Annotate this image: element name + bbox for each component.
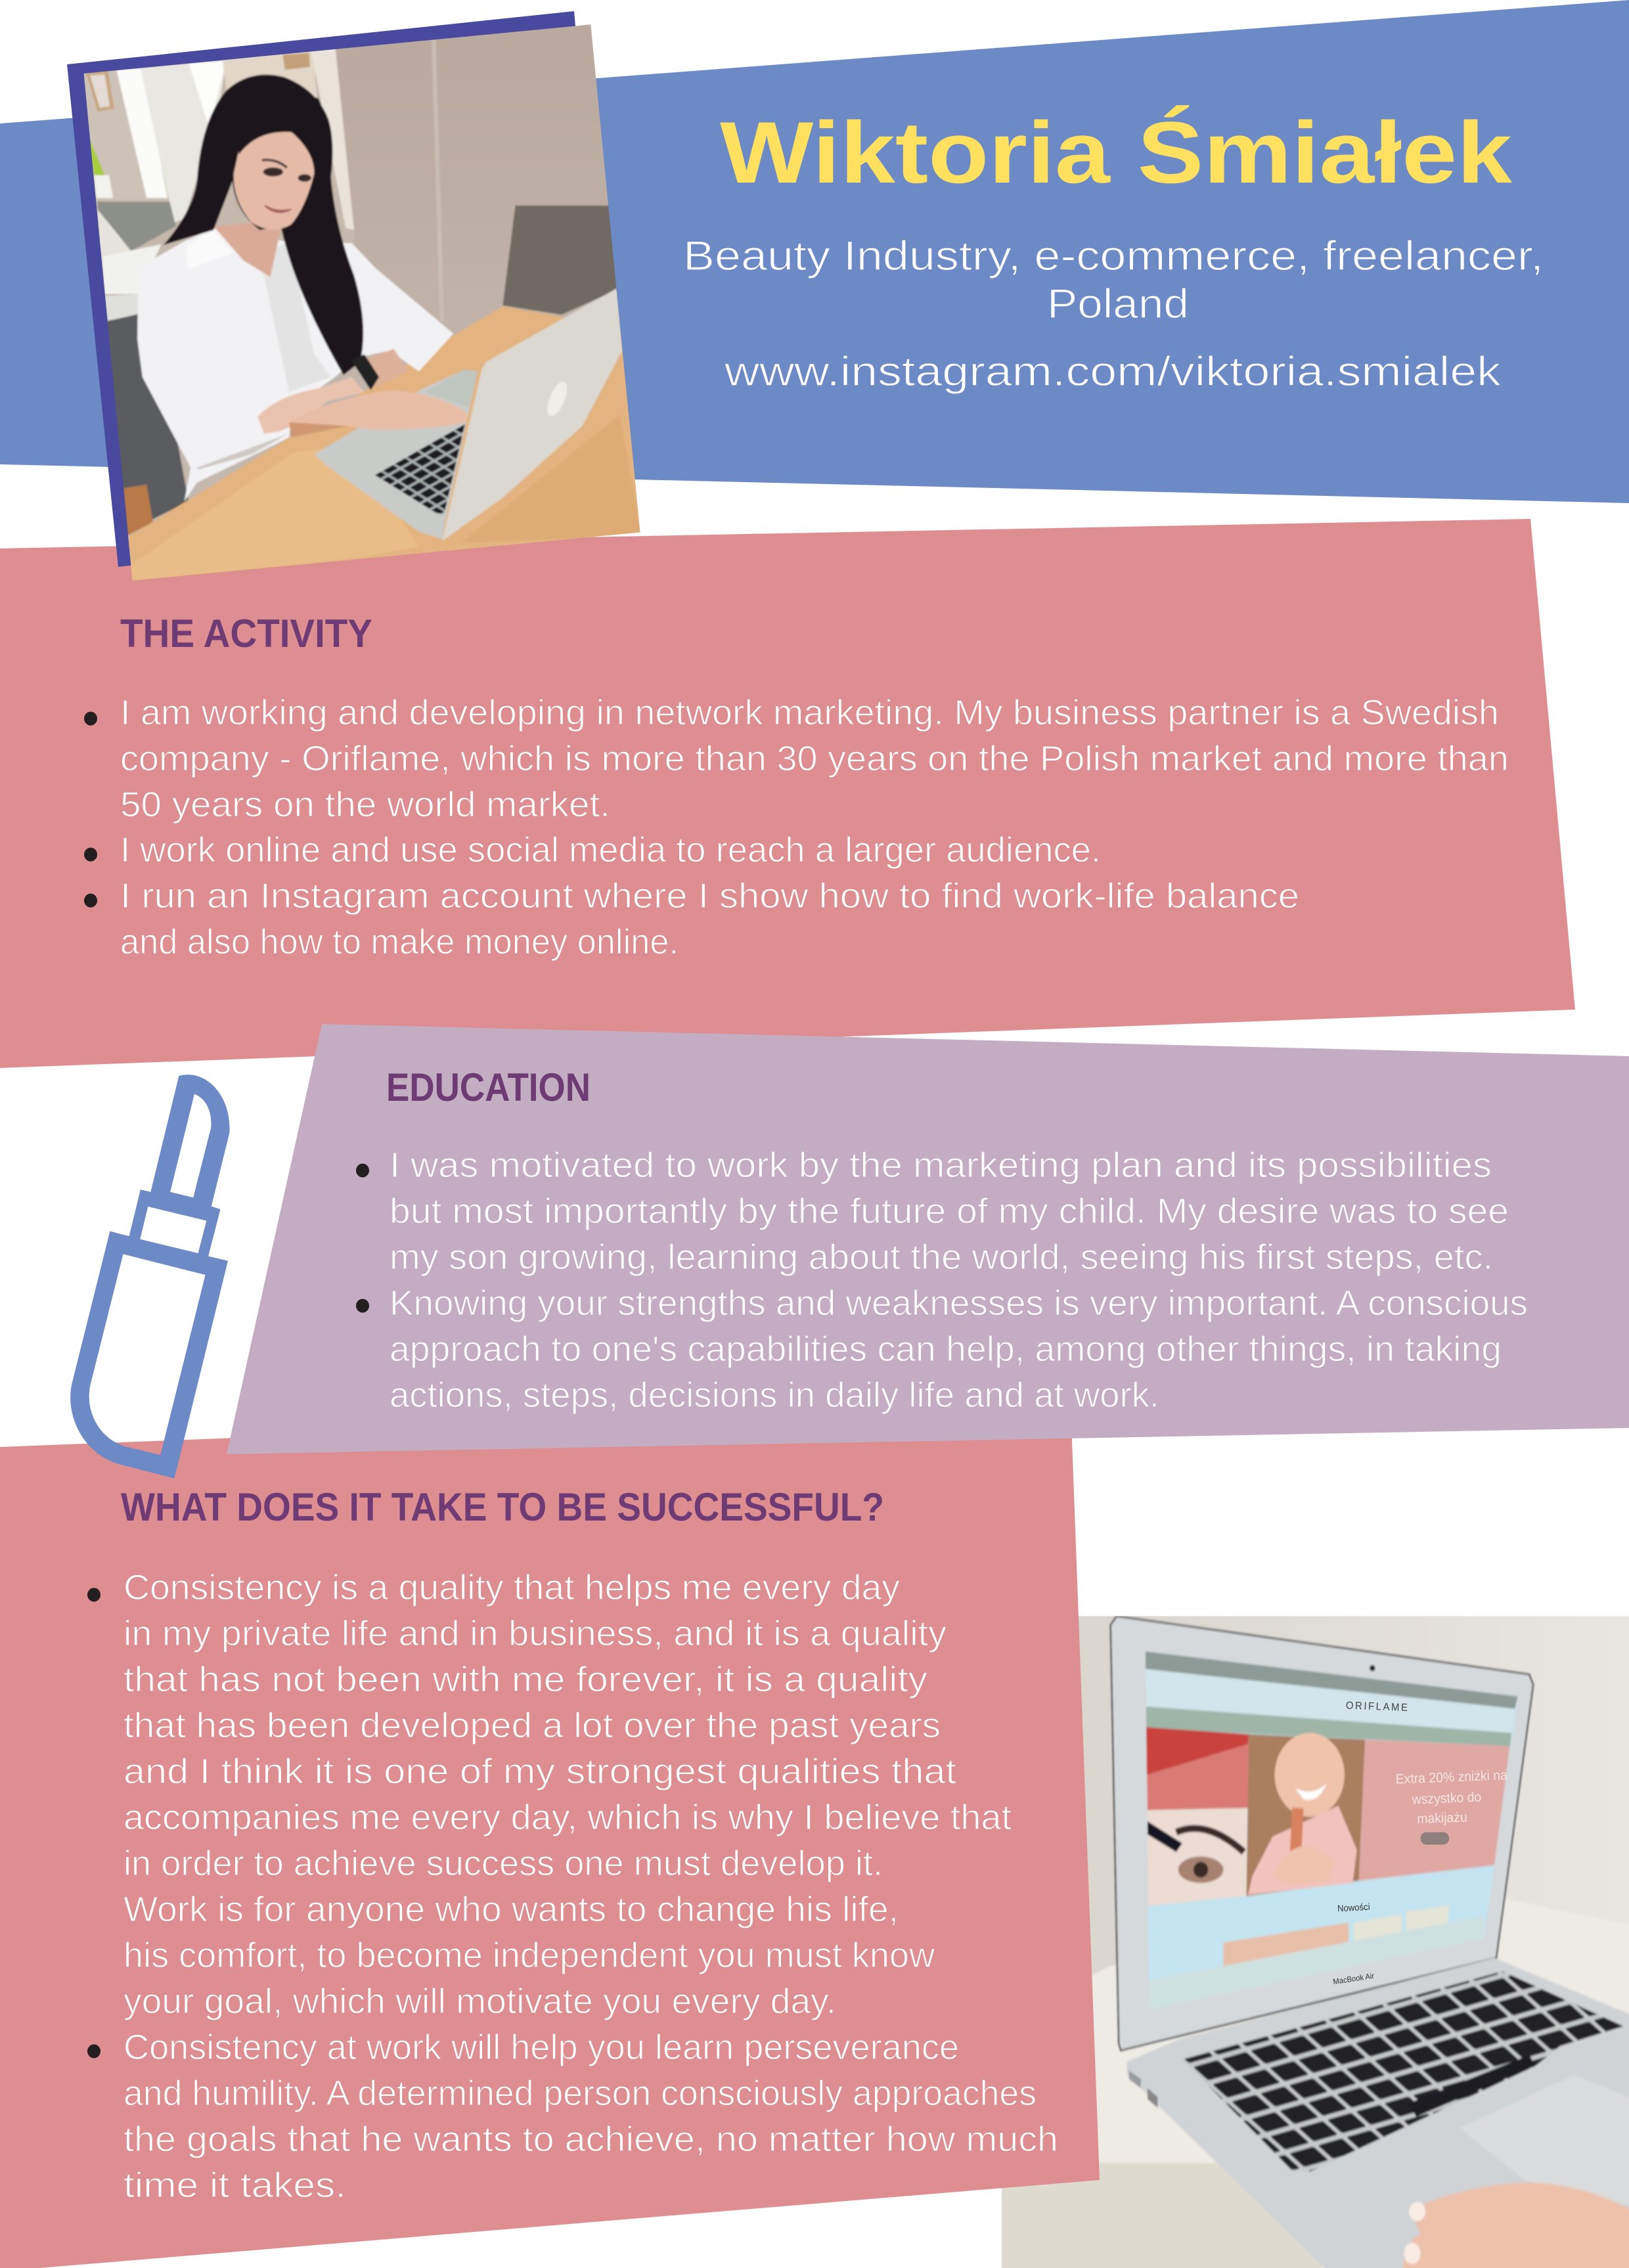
success text: time it takes. bbox=[123, 2166, 346, 2205]
activity text: I work online and use social media to reach a larger audience. bbox=[120, 830, 1101, 870]
photo: laptop with Oriflame website bbox=[993, 1607, 1629, 2268]
education text: approach to one's capabilities can help, among other things, in taking bbox=[390, 1329, 1502, 1369]
success text: Consistency at work will help you learn perseverance bbox=[123, 2028, 959, 2067]
success text: in my private life and in business, and it is a quality bbox=[123, 1614, 947, 1653]
website text: ORIFLAME bbox=[1346, 1700, 1410, 1714]
heading: education: EDUCATION bbox=[386, 1065, 591, 1109]
bullets bbox=[84, 712, 97, 908]
heading: success: WHAT DOES IT TAKE TO BE SUCCESSFUL? bbox=[121, 1485, 884, 1529]
panel: the activity bbox=[0, 519, 1575, 1068]
success text: your goal, which will motivate you every day. bbox=[123, 1982, 836, 2021]
success text: accompanies me every day, which is why I believe that bbox=[123, 1798, 1012, 1837]
success text: Consistency is a quality that helps me every day bbox=[123, 1568, 900, 1607]
education text: my son growing, learning about the world, seeing his first steps, etc. bbox=[390, 1237, 1493, 1277]
website text: MacBook Air bbox=[1333, 1972, 1375, 1986]
panel: education bbox=[227, 1024, 1629, 1454]
education text: actions, steps, decisions in daily life and at work. bbox=[390, 1375, 1159, 1415]
success text: the goals that he wants to achieve, no matter how much bbox=[123, 2120, 1058, 2159]
success text: that has not been with me forever, it is a quality bbox=[123, 1660, 927, 1699]
education text: I was motivated to work by the marketing plan and its possibilities bbox=[390, 1145, 1492, 1185]
success text: that has been developed a lot over the past years bbox=[123, 1706, 941, 1745]
education text: but most importantly by the future of my child. My desire was to see bbox=[390, 1191, 1509, 1231]
instagram link: www.instagram.com/viktoria.smialek bbox=[724, 349, 1502, 395]
success text: his comfort, to become independent you must know bbox=[123, 1936, 935, 1975]
heading: the activity: THE ACTIVITY bbox=[120, 611, 372, 656]
website text: makijażu bbox=[1417, 1810, 1467, 1827]
activity text: I run an Instagram account where I show how to find work-life balance bbox=[120, 876, 1299, 916]
website text: Nowości bbox=[1337, 1901, 1370, 1914]
website text: wszystko do bbox=[1411, 1790, 1482, 1808]
activity text: 50 years on the world market. bbox=[120, 785, 610, 824]
subtitle: Poland bbox=[1047, 281, 1189, 327]
education text: Knowing your strengths and weaknesses is very important. A conscious bbox=[390, 1283, 1528, 1323]
education text bbox=[390, 1145, 1528, 1415]
website text bbox=[1333, 1700, 1508, 1986]
photo frame bbox=[67, 11, 591, 567]
subtitle: Beauty Industry, e-commerce, freelancer, bbox=[683, 233, 1544, 279]
success text bbox=[123, 1568, 1058, 2205]
subtitle bbox=[683, 233, 1544, 327]
success text: and I think it is one of my strongest qualities that bbox=[123, 1752, 956, 1791]
name title: Wiktoria Śmiałek bbox=[720, 104, 1513, 202]
activity text bbox=[120, 693, 1509, 962]
activity text: company - Oriflame, which is more than 30 years on the Polish market and more than bbox=[120, 739, 1509, 778]
bullets bbox=[87, 1588, 100, 2058]
bullets bbox=[356, 1164, 369, 1312]
panel: what does it take to be successful bbox=[0, 1406, 1100, 2268]
icon: lipstick bbox=[70, 1075, 230, 1479]
activity text: and also how to make money online. bbox=[120, 922, 679, 962]
success text: in order to achieve success one must develop it. bbox=[123, 1844, 883, 1883]
activity text: I am working and developing in network marketing. My business partner is a Swedish bbox=[120, 693, 1499, 732]
website text: Extra 20% zniżki na bbox=[1395, 1768, 1508, 1787]
header banner bbox=[0, 0, 1629, 503]
success text: Work is for anyone who wants to change his life, bbox=[123, 1890, 899, 1929]
success text: and humility. A determined person consciously approaches bbox=[123, 2074, 1037, 2113]
photo: woman working on laptop bbox=[84, 24, 640, 581]
